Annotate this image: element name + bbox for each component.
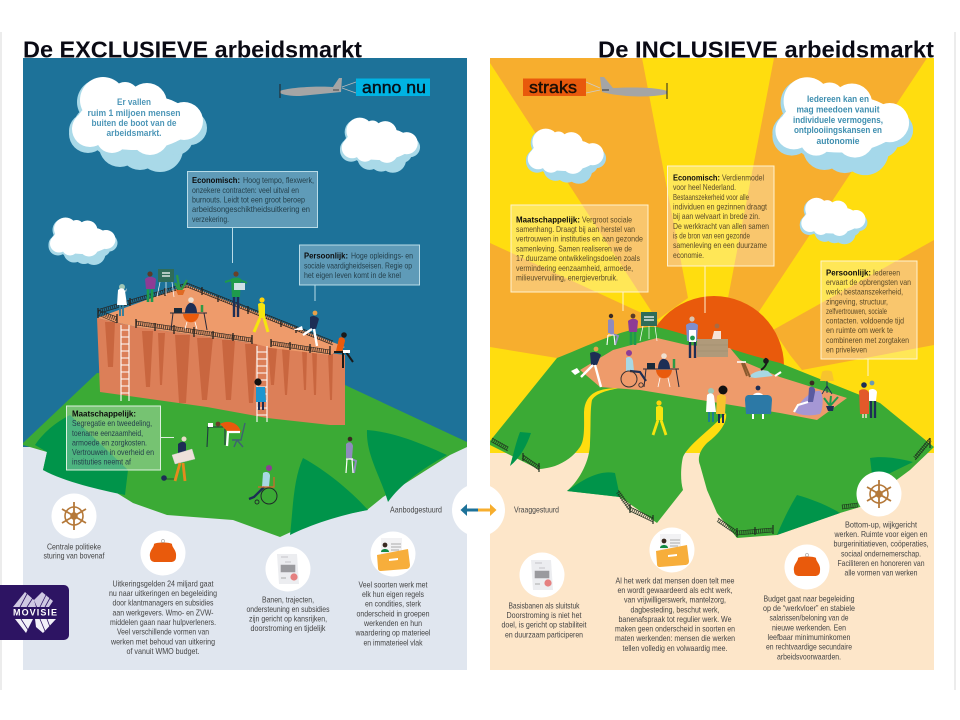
label: aanbodgestuurd: Aanbodgestuurd — [390, 504, 442, 514]
figure: runner — [293, 311, 319, 346]
figure: plant — [175, 275, 187, 295]
hill: green — [23, 373, 467, 537]
callout: persoonlijk rechts: zingeving, structuur, — [826, 296, 888, 306]
callout: economisch links: verzekering. — [192, 214, 229, 224]
figure: woman on stool — [346, 437, 356, 473]
figure: runner — [571, 347, 601, 387]
callout: maatschappelijk links: toename eenzaamheid, — [72, 428, 143, 438]
figure: woman in white coat — [706, 388, 716, 422]
callout: economisch links: burnouts. Leidt tot een groot beroep — [192, 194, 305, 204]
airplane with banner: anno nu — [280, 78, 430, 98]
fences on hill — [492, 438, 930, 537]
figure: purple hoodie — [628, 314, 638, 345]
cloud: left — [526, 129, 606, 184]
hill: dark green shades — [35, 415, 447, 535]
figure: woman in white coat — [117, 284, 127, 316]
callout: persoonlijk rechts: combineren met zorgtaken — [826, 335, 909, 345]
figure: woman on stool — [607, 314, 618, 345]
callout: economisch rechts: economie. — [673, 250, 704, 260]
item: banen: Banen, trajecten, — [262, 594, 314, 604]
cloud: message: Iedereen kan en — [807, 93, 869, 104]
item: uitkeringsgelden: aan werkgevers. Wmo- en ZVW- — [112, 608, 214, 618]
callout: economisch rechts: voor heel Nederland. — [673, 182, 736, 192]
cloud: message: ruim 1 miljoen mensen — [88, 107, 181, 118]
callout: persoonlijk rechts: en priveleven — [826, 344, 867, 354]
item: al het werk: Al het werk dat mensen doen telt mee — [616, 576, 735, 586]
figure: climber on ladder — [254, 378, 266, 410]
figure: purple hoodie — [145, 271, 156, 302]
callout: persoonlijk rechts: Iedereen — [873, 268, 900, 278]
figure: person in armchair — [745, 386, 772, 419]
label: vraaggestuurd: Vraaggestuurd — [514, 504, 559, 514]
logo: movisie — [0, 585, 69, 640]
callout: economisch links — [188, 172, 318, 263]
callout: maatschappelijk links: Segregatie en tweedeling, — [72, 418, 152, 428]
cloud: lower right — [800, 198, 867, 244]
figure: juggling green shirt — [225, 271, 247, 317]
item: budget: Budget gaat naar begeleiding — [764, 594, 855, 604]
callout: maatschappelijk rechts: samenleving. Samen realiseren we de — [516, 244, 632, 254]
cloud: message: individuele vermogens, — [793, 114, 883, 125]
fences on plateau — [98, 283, 333, 355]
callout: economisch rechts: De werkkracht van allen samen — [673, 221, 769, 231]
figure: carrying pill strip with ball and chain — [161, 436, 195, 481]
figure: person at desk — [643, 353, 679, 387]
item: uitkeringsgelden: werken met behoud van uitkering — [110, 636, 215, 646]
cloud: message — [772, 77, 913, 175]
item: bottom-up: Faciliteren en honoreren van — [838, 558, 925, 568]
item: centrale sturing: Centrale politieke — [47, 542, 101, 552]
figure: lamp and plant — [820, 370, 838, 411]
hill: green — [490, 327, 934, 538]
item: uitkeringsgelden — [109, 530, 217, 656]
item: budget: nieuwe werkenden. Een — [772, 622, 846, 632]
item: soorten werk: en condities, sterk — [365, 598, 422, 608]
callout: economisch rechts — [668, 166, 774, 313]
item: soorten werk: waardering op materieel — [355, 628, 431, 638]
ladders — [121, 325, 267, 422]
cloud: message: ontplooiingskansen en — [794, 124, 882, 135]
item: centrale sturing: sturing van bovenaf — [44, 550, 105, 560]
figure: yellow worker — [653, 400, 666, 435]
item: banen: zijn gericht op kansrijken, — [249, 614, 327, 624]
sky with sun rays — [490, 58, 934, 453]
callout: economisch links: arbeidsongeschiktheidsuitkering en — [192, 204, 310, 214]
title: inclusieve: De INCLUSIEVE arbeidsmarkt — [598, 36, 934, 62]
callout: economisch rechts: samenleving en een duurzame — [673, 240, 767, 250]
cloud: message: arbeidsmarkt. — [106, 127, 162, 138]
figure: embracing couple — [859, 381, 877, 418]
figure: man with apron — [686, 316, 698, 358]
figure: presentation board — [640, 312, 657, 341]
item: soorten werk — [355, 532, 431, 648]
item: basisbanen: Basisbanen als sluitstuk — [508, 600, 580, 610]
item: bottom-up: burgerinitiatieven, coöperaties, — [834, 538, 928, 548]
cloud: message: Er vallen — [117, 96, 151, 107]
callout: maatschappelijk rechts: vertrouwen in instituties en aan gezonde — [516, 234, 643, 244]
item: banen: ondersteuning en subsidies — [246, 604, 330, 614]
callout: persoonlijk links: sociale vaardigheidseisen. Regie op — [304, 260, 412, 270]
figure: person at desk — [170, 297, 207, 330]
callout: persoonlijk rechts: ervaart de opbrengsten van — [826, 277, 911, 287]
figure: person on beanbag — [794, 381, 823, 415]
item: basisbanen: Doorstroming is niet het — [506, 610, 582, 620]
cloud: message — [69, 77, 207, 172]
figure: woman with afro — [716, 386, 728, 423]
item: basisbanen: en duurzaam participeren — [505, 630, 583, 640]
item: budget — [763, 544, 855, 662]
item: soorten werk: onderscheid in groepen — [356, 608, 430, 618]
item: uitkeringsgelden: nu naar uitkeringen en begeleiding — [109, 588, 217, 598]
item: al het werk: banenafspraak tot regulier werk. We — [618, 614, 732, 624]
item: soorten werk: Veel soorten werk met — [358, 580, 428, 590]
item: bottom-up — [834, 472, 928, 578]
item: basisbanen: doel, is gericht op stabiliteit — [502, 620, 587, 630]
hill: dark green shades — [510, 432, 913, 535]
center arrows badge — [452, 484, 505, 536]
airplane with banner: straks: straks — [529, 78, 577, 97]
item: al het werk: maten werkenden: mensen die werken — [615, 633, 735, 643]
callout: economisch rechts: is de bron van een gezonde — [673, 230, 750, 240]
item: al het werk: en wordt gewaardeerd als echt werk, — [618, 585, 732, 595]
figure: sitting on the edge — [334, 332, 353, 368]
item: budget: arbeidsvoorwaarden. — [777, 652, 841, 662]
callout: persoonlijk rechts: Persoonlijk: — [826, 268, 871, 278]
callout: economisch links: Hoog tempo, flexwerk, — [243, 175, 314, 185]
logo: movisie: MOVISIE — [13, 608, 57, 618]
item: soorten werk: en immaterieel vlak — [364, 638, 423, 648]
callout: persoonlijk links: Persoonlijk: — [304, 250, 348, 260]
callout: economisch rechts: Bestaanszekerheid voor alle — [673, 192, 749, 202]
figure: person in wheelchair — [249, 465, 277, 504]
airplane with banner: anno nu: anno nu — [362, 78, 426, 97]
title: exclusieve: De EXCLUSIEVE arbeidsmarkt — [23, 36, 362, 62]
callout: economisch links: onzekere contracten: veel uitval en — [192, 185, 299, 195]
sun — [644, 296, 784, 366]
item: uitkeringsgelden: door klantmanagers en subsidies — [112, 598, 214, 608]
callout: economisch rechts: Verdienmodel — [722, 172, 764, 182]
item: banen: doorstroming en tijdelijk — [250, 623, 326, 633]
cloud: right — [340, 118, 420, 173]
item: al het werk: maken geen onderscheid in soorten en — [615, 624, 735, 634]
item: bottom-up: werken. Ruimte voor eigen en — [834, 529, 928, 539]
cloud: lower left — [48, 218, 118, 265]
item: al het werk: tellen volledig en volwaardig mee. — [622, 643, 728, 653]
callout: persoonlijk links — [300, 245, 420, 301]
item: budget: leefbaar minimuminkomen — [768, 632, 851, 642]
item: uitkeringsgelden: Uitkeringsgelden 24 miljard gaat — [112, 578, 214, 588]
figure: person in wheelchair — [621, 350, 646, 387]
figure: woman lying down with laptop — [737, 358, 781, 378]
callout: persoonlijk rechts — [821, 261, 917, 376]
panel: exclusive labour market — [23, 58, 467, 670]
item: basisbanen — [502, 552, 587, 640]
callout: maatschappelijk links — [66, 406, 174, 470]
item: budget: salarissen/beloning van de — [770, 612, 849, 622]
item: banen — [246, 546, 330, 633]
item: budget: en rechtvaardige secundaire — [766, 642, 852, 652]
callout: maatschappelijk rechts — [511, 205, 648, 311]
item: bottom-up: sociaal ondernemerschap. — [841, 548, 921, 558]
callout: maatschappelijk rechts: Maatschappelijk: — [516, 214, 580, 224]
callout: maatschappelijk links: instituties neemt af — [72, 456, 132, 466]
callout: economisch rechts: bij aan welvaart in brede zin. — [673, 211, 760, 221]
callout: maatschappelijk rechts: Vergroot sociale — [582, 214, 632, 224]
salmon plaza — [580, 338, 847, 420]
callout: economisch links: Economisch: — [192, 175, 240, 185]
figure: presentation board — [157, 269, 174, 297]
panel: inclusive labour market — [490, 58, 934, 670]
figure: yellow worker — [254, 297, 268, 332]
callout: maatschappelijk rechts: 17 duurzame ontwikkelingsdoelen zoals — [516, 253, 640, 263]
cliff plateau — [97, 285, 345, 425]
item: uitkeringsgelden: of vanuit WMO budget. — [126, 646, 200, 656]
item: al het werk: dagbesteding, beschut werk, — [630, 604, 720, 614]
item: al het werk — [615, 528, 735, 653]
callout: persoonlijk rechts: en ruimte om werk te — [826, 325, 893, 335]
cloud: message: mag meedoen vanuit — [796, 104, 880, 114]
callout: maatschappelijk rechts: milieuvervuiling, energieverbruik. — [516, 272, 618, 282]
callout: economisch rechts: individuen en gezinnen draagt — [673, 202, 768, 212]
callout: persoonlijk rechts: zelfvertrouwen, sociale — [826, 306, 887, 316]
airplane with banner: straks — [523, 77, 667, 99]
item: uitkeringsgelden: middelen gaan naar hulpverleners. — [110, 617, 216, 627]
figure: reception desk with person — [697, 324, 728, 357]
callout: persoonlijk rechts: contacten. voldoende tijd — [826, 316, 904, 326]
callout: maatschappelijk rechts: samenhang. Draagt bij aan herstel van — [516, 224, 635, 234]
cloud: message: autonomie — [816, 135, 860, 146]
item: budget: op de “werkvloer” en stabiele — [763, 603, 855, 613]
item: uitkeringsgelden: Veel verschillende vormen van — [117, 626, 209, 636]
callout: persoonlijk links: Hoge opleidings- en — [351, 250, 413, 260]
item: bottom-up: alle vormen van werken — [844, 568, 918, 578]
item: soorten werk: werkenden en hun — [363, 618, 422, 628]
callout: maatschappelijk links: armoede en zorgkosten. — [72, 438, 147, 448]
item: soorten werk: elk hun eigen regels — [362, 589, 424, 599]
item: centrale sturing — [44, 494, 105, 560]
callout: economisch rechts: Economisch: — [673, 172, 720, 182]
item: al het werk: van vrijwilligerswerk, mantelzorg, — [624, 594, 726, 604]
callout: maatschappelijk links: Vertrouwen in overheid en — [72, 447, 154, 457]
figure: person asleep at desk — [207, 422, 245, 447]
item: bottom-up: Bottom-up, wijkgericht — [845, 520, 918, 530]
callout: persoonlijk rechts: werk; bestaanszekerheid, — [825, 286, 903, 296]
cloud: message: buiten de boot van de — [92, 117, 176, 128]
callout: persoonlijk links: het eigen leven komt in de knel — [304, 270, 401, 280]
callout: maatschappelijk rechts: vermindering eenzaamheid, armoede, — [516, 263, 633, 273]
callout: maatschappelijk links: Maatschappelijk: — [72, 408, 136, 418]
